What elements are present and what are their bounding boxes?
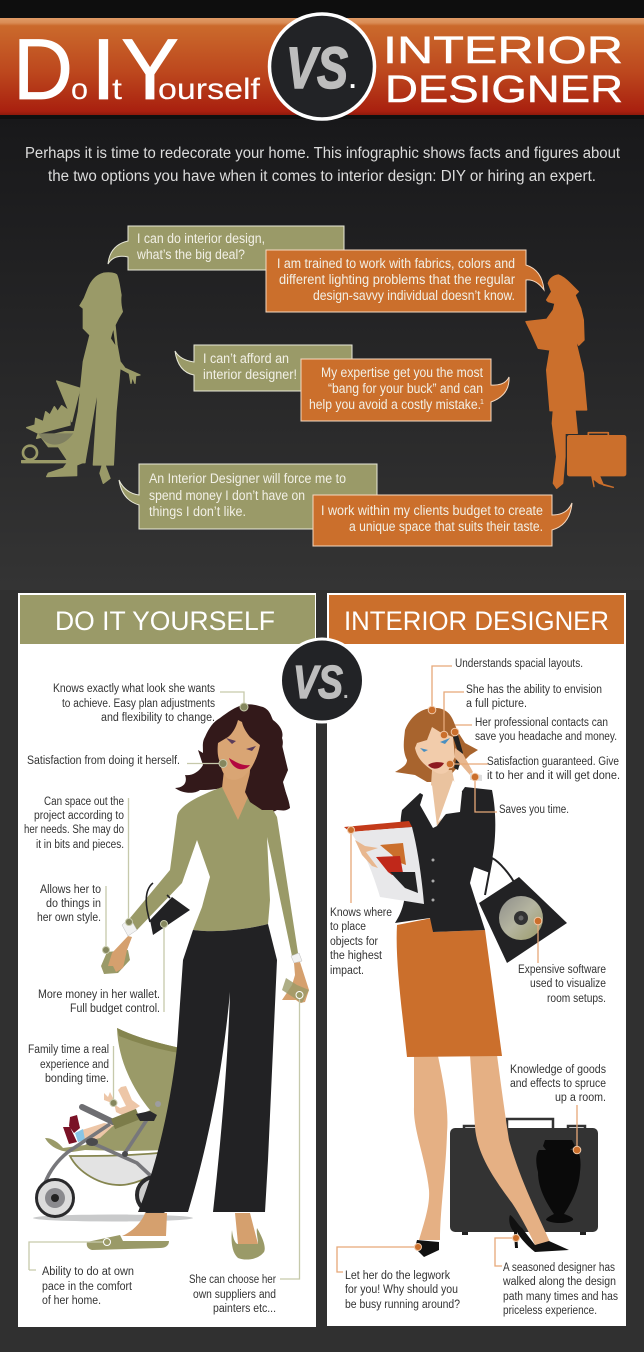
- callout text: look: and flexibility to change.: [101, 712, 215, 724]
- callout text: pace: Ability to do at own: [42, 1266, 134, 1278]
- speech bubble: designer 3: [313, 495, 572, 546]
- title: interior designer: INTERIOR: [383, 30, 623, 72]
- collar: [420, 780, 462, 828]
- cuffs and hands: [122, 918, 302, 963]
- blazer: [395, 787, 495, 932]
- heading: interior designer: [329, 595, 624, 644]
- callout text: contacts: [475, 717, 617, 743]
- callout text: legwork: for you! Why should you: [345, 1284, 458, 1296]
- callout text: goods: Knowledge of goods: [510, 1064, 606, 1076]
- silhouette: designer with briefcase: [526, 275, 626, 488]
- callout text: software: room setups.: [547, 993, 606, 1005]
- callout text: project: Can space out the: [44, 796, 124, 808]
- sweater: [130, 787, 298, 956]
- speech bubble: designer 1: different lighting problems that the regular: [279, 272, 515, 287]
- speech bubble: diy 2: [175, 345, 352, 391]
- callout text: look: Knows exactly what look she wants: [53, 683, 215, 695]
- title banner: [0, 14, 644, 119]
- callout text: experience: path many times and has: [503, 1291, 618, 1303]
- speech bubble: designer 2: My expertise get you the most: [321, 365, 483, 380]
- callout text: objects: [330, 907, 392, 977]
- vs badge: panels: [280, 639, 364, 722]
- callout text: experience: [502, 1262, 618, 1317]
- callout text: family: bonding time.: [45, 1073, 109, 1085]
- callout text: project: it in bits and pieces.: [36, 839, 124, 851]
- callout text: software: Expensive software: [518, 964, 606, 976]
- tote bag: [479, 858, 567, 963]
- callout text: style: do things in: [46, 898, 101, 910]
- speech bubble: diy 2: interior designer!: [203, 367, 297, 382]
- hair back: [395, 708, 478, 782]
- panel: do it yourself: [18, 593, 316, 1327]
- callout text: money: [38, 989, 160, 1015]
- callout text: objects: Knows where: [330, 907, 392, 919]
- callout text: objects: to place: [330, 921, 366, 933]
- callout text: family: Family time a real: [28, 1044, 109, 1056]
- title: do it yourself: Y: [121, 22, 179, 118]
- callout text: envision: a full picture.: [466, 698, 527, 710]
- callout text: contacts: Her professional contacts can: [475, 717, 608, 729]
- title: do it yourself: ourself: [158, 73, 261, 106]
- skirt: [397, 918, 502, 1057]
- callout text: goods: [510, 1064, 606, 1104]
- wheels: [36, 1180, 74, 1216]
- callout text: legwork: Let her do the legwork: [345, 1270, 450, 1282]
- vs badge: .: [349, 64, 356, 94]
- callout text: layouts: Understands spacial layouts.: [455, 658, 583, 670]
- purse: [150, 897, 190, 935]
- speech bubble: designer 2: help you avoid a costly mistake.: [309, 397, 481, 412]
- callout text: style: [37, 884, 101, 924]
- figure: interior designer: [344, 708, 569, 1257]
- speech bubble: designer 1: design-savvy individual doesn’t know.: [313, 288, 515, 303]
- callout text: look: [53, 683, 215, 724]
- heading: interior designer: INTERIOR DESIGNER: [344, 606, 609, 636]
- briefcase with vase: [450, 1119, 598, 1235]
- vs badge: VS: [286, 36, 348, 101]
- speech bubble: designer 1: [266, 250, 544, 312]
- speech bubble: diy 2: I can’t afford an: [203, 351, 289, 366]
- heading: do it yourself: DO IT YOURSELF: [55, 606, 275, 636]
- hair curls over shoulder: [245, 745, 290, 810]
- vs badge: panels: VS: [293, 656, 343, 708]
- callout text: objects: the highest: [330, 950, 383, 962]
- face: [218, 720, 260, 780]
- callout text: legwork: be busy running around?: [345, 1299, 460, 1311]
- intro text: the two options you have when it comes to interior design: DIY or hiring an expert.: [48, 168, 596, 185]
- callout text: look: to achieve. Easy plan adjustments: [62, 698, 215, 710]
- callout text: pace: pace in the comfort: [42, 1281, 133, 1293]
- speech bubble: designer 2: [301, 359, 509, 421]
- callout text: goods: and effects to spruce: [510, 1078, 606, 1090]
- speech bubble: diy 3: things I don’t like.: [149, 504, 246, 519]
- callout text: goods: up a room.: [555, 1092, 606, 1104]
- title: do it yourself: t: [112, 73, 123, 106]
- speech bubble: diy 3: An Interior Designer will force me to: [149, 471, 346, 486]
- baby: [104, 1086, 140, 1116]
- callout text: suppliers: own suppliers and: [193, 1289, 276, 1301]
- intro text: Perhaps it is time to redecorate your home. This infographic shows facts and figures about: [25, 145, 621, 162]
- callout lines and dots: diy: [29, 692, 303, 1279]
- panel: interior designer: [327, 593, 626, 1326]
- callout text: style: her own style.: [37, 912, 101, 924]
- title: do it yourself: D: [13, 22, 73, 118]
- speech bubble: diy 3: spend money I don’t have on: [149, 488, 305, 503]
- speech bubble: diy 1: what’s the big deal?: [136, 247, 245, 262]
- callout text: software: [518, 964, 606, 1005]
- figure: diy woman: [87, 704, 309, 1260]
- callout text: envision: [466, 684, 602, 710]
- callout text: money: Full budget control.: [70, 1003, 160, 1015]
- heading: do it yourself: [20, 595, 315, 644]
- title: do it yourself: o: [71, 73, 88, 106]
- phone and hand: [453, 735, 463, 770]
- callout text: satisfaction: Satisfaction from doing it herself.: [27, 755, 180, 767]
- callout text: project: [24, 796, 124, 851]
- feet and slippers: [122, 1213, 258, 1244]
- callout text: envision: She has the ability to envision: [466, 684, 602, 696]
- intro text: [25, 145, 621, 185]
- callout text: project: her needs. She may do: [24, 824, 124, 836]
- callout text: pace: of her home.: [42, 1295, 101, 1307]
- callout text: family: [28, 1044, 109, 1085]
- callout text: software: used to visualize: [530, 978, 606, 990]
- stroller with baby: [33, 1028, 193, 1222]
- vs badge: [270, 14, 374, 119]
- canopy: [117, 1028, 180, 1110]
- callout text: time: Saves you time.: [499, 804, 569, 816]
- speech bubble: designer 2: “bang for your buck” and can: [328, 381, 483, 396]
- legs: [414, 1055, 550, 1245]
- speech bubble: diy 1: [108, 226, 344, 270]
- callout text: guaranteed: it to her and it will get done.: [487, 770, 620, 782]
- callout text: project: project according to: [34, 810, 124, 822]
- silhouette: diy woman with stroller: [22, 273, 140, 483]
- title: interior designer: [383, 30, 623, 111]
- callout text: guaranteed: [487, 756, 620, 782]
- callout text: style: Allows her to: [40, 884, 101, 896]
- speech bubble: diy 3: [119, 464, 377, 529]
- speech bubble: designer 3: a unique space that suits their taste.: [349, 519, 543, 534]
- callout text: objects: impact.: [330, 965, 364, 977]
- callout text: experience: A seasoned designer has: [503, 1262, 615, 1274]
- neck: [222, 770, 250, 822]
- callout text: suppliers: painters etc...: [213, 1303, 276, 1315]
- frame: [82, 1107, 113, 1122]
- magazine: [344, 821, 424, 904]
- callout text: money: More money in her wallet.: [38, 989, 160, 1001]
- speech bubble: diy 1: I can do interior design,: [137, 231, 265, 246]
- vs badge: panels: .: [343, 681, 349, 703]
- title: interior designer: DESIGNER: [385, 69, 623, 111]
- hair back: [175, 704, 290, 812]
- callout text: objects: objects for: [330, 936, 378, 948]
- shoes: [415, 1215, 569, 1257]
- callout text: contacts: save you headache and money.: [475, 731, 617, 743]
- title: do it yourself: I: [91, 22, 116, 118]
- basket: [70, 1152, 170, 1185]
- title: do it yourself: [13, 22, 261, 118]
- face: [415, 727, 455, 774]
- callout text: suppliers: She can choose her: [189, 1274, 276, 1286]
- speech bubble: designer 3: I work within my clients budget to create: [321, 503, 543, 518]
- callout text: guaranteed: Satisfaction guaranteed. Give: [487, 756, 619, 768]
- pants: [138, 924, 277, 1212]
- seat: [45, 1100, 170, 1152]
- callout text: pace: [42, 1266, 134, 1307]
- callout text: family: experience and: [40, 1059, 109, 1071]
- neck: [430, 770, 456, 828]
- callout text: suppliers: [189, 1274, 276, 1315]
- callout lines and dots: designer: [337, 666, 581, 1272]
- speech bubble: designer 1: I am trained to work with fabrics, colors and: [277, 256, 515, 271]
- callout text: experience: priceless experience.: [503, 1305, 597, 1317]
- callout text: experience: walked along the design: [502, 1276, 616, 1288]
- speech bubble: designer 2: 1: [480, 399, 484, 406]
- callout text: legwork: [345, 1270, 460, 1311]
